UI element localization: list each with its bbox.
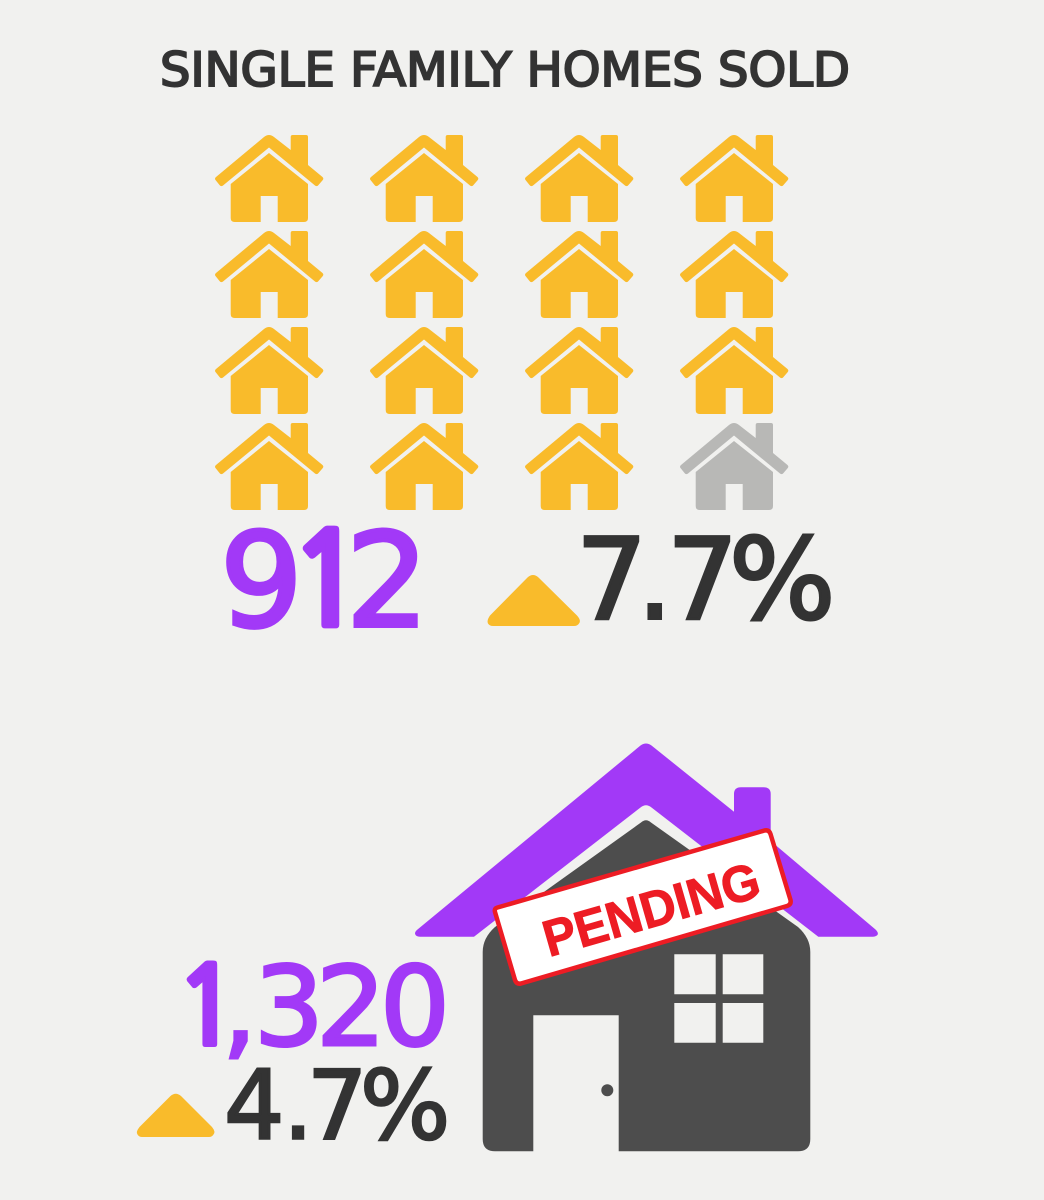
icon: house row 2 col 2 bbox=[370, 231, 478, 318]
icon: house row 4 col 3 bbox=[525, 423, 633, 510]
icon: house row 1 col 4 bbox=[680, 135, 788, 222]
pictogram: houses sold bbox=[215, 135, 788, 510]
roof with chimney bbox=[415, 744, 878, 937]
icon: house row 3 col 2 bbox=[370, 327, 478, 414]
door knob bbox=[601, 1084, 613, 1096]
icon: house row 2 col 3 bbox=[525, 231, 633, 318]
title: SINGLE FAMILY HOMES SOLD bbox=[160, 43, 850, 98]
icon: house row 4 col 1 bbox=[215, 423, 323, 510]
sign text: PENDING bbox=[536, 851, 766, 968]
illustration: pending house bbox=[415, 744, 878, 1151]
icon: up triangle small bbox=[137, 1094, 214, 1137]
icon: house row 4 col 2 bbox=[370, 423, 478, 510]
icon: house row 2 col 1 bbox=[215, 231, 323, 318]
icon: house row 1 col 3 bbox=[525, 135, 633, 222]
stat: homes sold 912: 2 bbox=[346, 505, 429, 657]
stat: pending change 4.7%: 4.7% bbox=[224, 1052, 450, 1162]
stat: pending 1,320: 1 bbox=[174, 953, 241, 1062]
icon: house row 3 col 3 bbox=[525, 327, 633, 414]
icon: house row 2 col 4 bbox=[680, 231, 788, 318]
house body bbox=[483, 820, 810, 1151]
icon: grey partial house bbox=[680, 423, 788, 510]
stat: sold change 7.7%: 7.7% bbox=[576, 516, 835, 646]
sign plate bbox=[495, 830, 791, 984]
icon: house row 3 col 4 bbox=[680, 327, 788, 414]
icon: up triangle bbox=[488, 575, 580, 626]
sign: pending bbox=[495, 830, 791, 984]
icon: house row 1 col 2 bbox=[370, 135, 478, 222]
stat: homes sold 912: 1 bbox=[288, 518, 367, 646]
icon: house row 1 col 1 bbox=[215, 135, 323, 222]
icon: house row 3 col 1 bbox=[215, 327, 323, 414]
stat: homes sold 912: 9 bbox=[220, 505, 303, 657]
stat: pending 1,320: ,320 bbox=[222, 943, 450, 1071]
